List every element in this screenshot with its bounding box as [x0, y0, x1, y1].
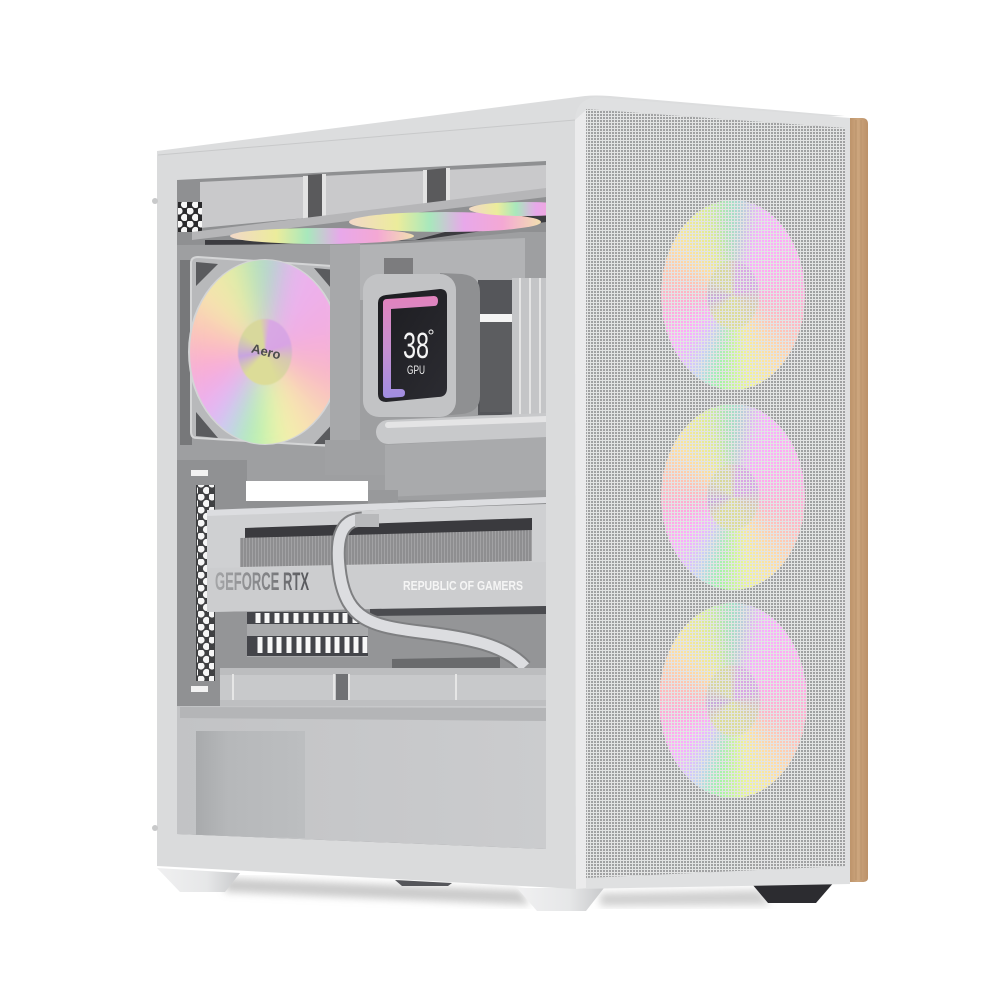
bottom fans: [220, 668, 546, 707]
rear fan logo: Aero: [250, 341, 282, 362]
lower rear wall: [177, 460, 247, 500]
top fan 2: [349, 212, 541, 232]
PSU cutout: [196, 731, 305, 838]
GeForce RTX logo: GEFORCE RTX: [215, 568, 309, 596]
top fans frame: [200, 165, 546, 228]
top face of case: [157, 96, 845, 156]
radiator back area: [478, 280, 512, 415]
vertical hex strip: [196, 485, 215, 681]
radiator: [512, 278, 546, 414]
window interior: [177, 161, 546, 849]
GPU power cable: [338, 519, 525, 667]
pump base: [385, 436, 546, 497]
cable connector: [355, 514, 379, 527]
product illustration: PC case: [152, 96, 868, 911]
bracket pins: [191, 470, 208, 692]
front corner pillar: [575, 110, 586, 889]
pump front: [363, 274, 456, 417]
front mesh backing: [586, 109, 845, 878]
hex mesh top corner: [178, 202, 202, 232]
rear panel thumbscrew top: [152, 198, 158, 204]
dark band under top fans: [205, 216, 546, 245]
GPU backplate: [207, 497, 546, 517]
LCD screen: [378, 289, 447, 402]
AIO pump block: [363, 273, 480, 417]
top fan rail: [192, 188, 546, 240]
feet: [157, 868, 835, 911]
front panel body: [575, 97, 850, 889]
GPU label: GPU: [407, 363, 425, 377]
GPU body: [207, 504, 546, 612]
PSU shroud: [177, 706, 547, 856]
GPU light band: [212, 606, 528, 612]
front mesh grille: [586, 109, 845, 878]
GPU lower shadow: [370, 606, 546, 616]
foot: rear left: [157, 868, 240, 892]
motherboard chip: [392, 657, 500, 668]
foot: centre underside: [395, 880, 452, 886]
back wall under GPU: [215, 610, 546, 680]
GPU dark slot: [245, 518, 532, 538]
coolant tube: [388, 425, 546, 432]
foot: front left: [517, 888, 604, 911]
GPU heatsink fins: [240, 530, 532, 567]
floor shadow: [225, 878, 770, 906]
pump mount: [330, 244, 360, 440]
front fan bottom: [659, 603, 807, 798]
rear fan rotor: [190, 260, 340, 444]
degree mark: [429, 330, 433, 334]
rear wall: [177, 232, 546, 500]
temperature reading: 38: [403, 325, 429, 366]
rear panel thumbscrew bottom: [152, 825, 158, 831]
wooden side panel: [848, 118, 868, 882]
top fan 1: [230, 228, 414, 244]
pink status bar: [383, 296, 438, 398]
rear fan frame: [191, 257, 340, 446]
foot: front right dark: [752, 881, 835, 903]
side panel top edge: [158, 120, 575, 155]
front fans: [659, 200, 807, 798]
side frame: [157, 120, 576, 889]
Republic of Gamers logo: REPUBLIC OF GAMERS: [403, 578, 523, 593]
front fan middle: [661, 404, 805, 590]
rear fan: [188, 257, 342, 446]
vent dots: [384, 258, 413, 274]
pump side: [440, 273, 480, 416]
front fan top: [661, 200, 805, 390]
graphics card: [207, 497, 546, 616]
top fan 3: [469, 202, 546, 216]
PCI slots: [247, 612, 368, 657]
